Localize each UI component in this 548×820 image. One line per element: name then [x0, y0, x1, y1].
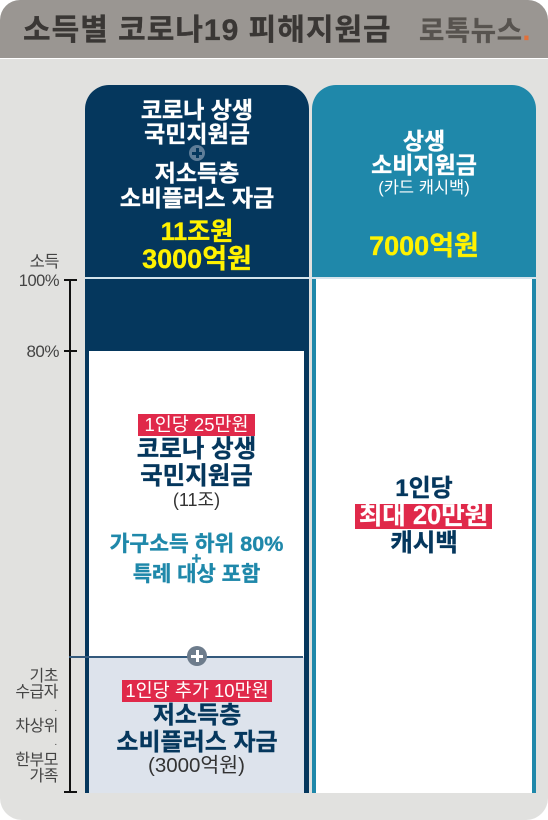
panel: national support column: [85, 85, 309, 793]
eligibility text 2: 특례 대상 포함: [133, 563, 260, 586]
label: recipients: 기초: [30, 668, 58, 685]
label: income 100%: 소득: [30, 253, 59, 271]
heading: consumption: 소비지원금: [371, 152, 477, 178]
heading: consumption: 상생: [403, 128, 445, 154]
inner panel: white: [89, 351, 304, 793]
tag: up to 200k: 최대 20만원: [359, 502, 488, 530]
label: recipients: 수급자: [15, 684, 58, 701]
panel: consumption column: [312, 85, 536, 793]
heading: low income body: 저소득층: [153, 702, 241, 729]
heading: consumption: [371, 128, 477, 178]
amount: [142, 218, 252, 274]
icon: plus: [187, 646, 207, 666]
amount: 3000억원: [142, 244, 252, 274]
eligibility text: 가구소득 하위 80%: [110, 532, 283, 556]
heading: low income body: 소비플러스 자금: [116, 729, 278, 756]
subheading: (카드 캐시백): [378, 179, 470, 197]
inner panel: white: [316, 278, 532, 793]
tag: 250k: 1인당 25만원: [144, 414, 249, 435]
heading: low income: 소비플러스 자금: [120, 185, 274, 211]
heading: low income: [120, 160, 274, 211]
plus sign: +: [192, 549, 201, 568]
amount: 11조원: [161, 218, 233, 246]
heading: national support body: [137, 436, 256, 490]
divider at 100%: [85, 277, 536, 279]
label: income 100%: 100%: [19, 272, 59, 290]
label: recipients: 한부모: [15, 752, 58, 769]
text: per person: 1인당: [395, 475, 453, 502]
title: 소득별 코로나19 피해지원금: [23, 14, 392, 47]
heading: national support: [141, 97, 253, 147]
heading: national support: 코로나 상생: [141, 97, 253, 123]
separator line: [69, 656, 303, 658]
inner panel: low income: [89, 657, 304, 793]
icon: plus small: [189, 145, 205, 161]
heading: low income body: [116, 702, 278, 756]
label: recipients: 가족: [30, 768, 58, 785]
tag: 100k: 1인당 추가 10만원: [125, 680, 269, 701]
label: recipients: 차상위: [15, 718, 58, 735]
heading: national support: 국민지원금: [144, 121, 250, 147]
note: 11조: (11조): [173, 490, 220, 510]
logo: 로톡뉴스.: [419, 15, 531, 46]
label: recipients: [15, 668, 58, 785]
heading: low income: 저소득층: [155, 160, 239, 186]
text: cashback: 캐시백: [390, 530, 458, 557]
amount: 7000억원: [369, 231, 479, 261]
header bar: [0, 0, 548, 58]
heading: national support body: 국민지원금: [140, 463, 253, 490]
label: recipients: ·: [54, 705, 57, 716]
heading: national support body: 코로나 상생: [137, 436, 256, 463]
label: income 100%: [19, 253, 59, 290]
label: 80%: 80%: [26, 342, 59, 361]
axis: [64, 279, 77, 793]
label: recipients: ·: [54, 739, 57, 750]
note: 3000억원: (3000억원): [148, 754, 245, 777]
